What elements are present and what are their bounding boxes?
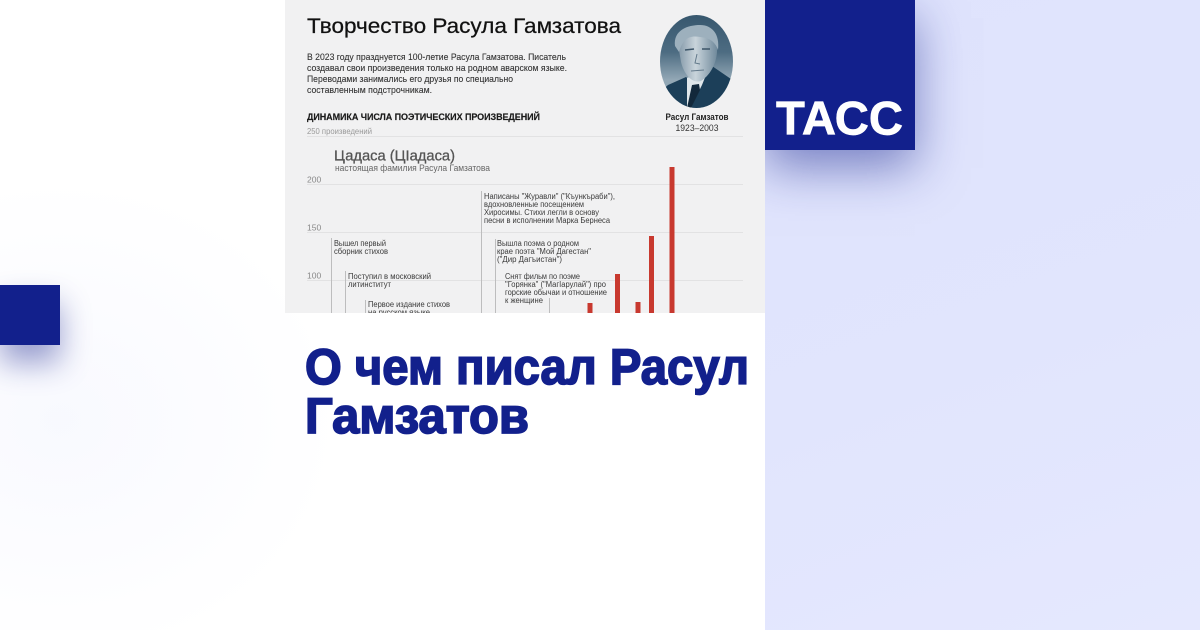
annotations: Поступил в московский <box>348 272 431 281</box>
y axis values: 150 <box>307 222 321 232</box>
chart heading: ДИНАМИКА ЧИСЛА ПОЭТИЧЕСКИХ ПРОИЗВЕДЕНИЙ <box>307 111 540 122</box>
annotations: Вышла поэма о родном <box>497 239 579 248</box>
surname note <box>334 148 491 173</box>
annotations: Снят фильм по поэме <box>505 272 581 281</box>
panel: infographic preview <box>285 0 765 313</box>
annotations: ("Дир Дагъистан") <box>497 255 562 264</box>
annotations: Вышел первый <box>334 239 386 248</box>
surname note: Цадаса (ЦIадаса) <box>334 148 455 164</box>
chart: poetic works dynamics <box>307 126 743 317</box>
bars <box>588 167 674 313</box>
portrait: Rasul Gamzatov <box>660 15 736 112</box>
annotations: "Горянка" ("МагIарулай") про <box>505 280 607 289</box>
surname note: настоящая фамилия Расула Гамзатова <box>335 163 491 173</box>
portrait caption: 1923–2003 <box>676 123 718 133</box>
intro text: создавал свои произведения только на родном аварском языке. <box>307 63 567 73</box>
decorative blue square <box>0 285 60 345</box>
annotation leader lines <box>332 191 550 313</box>
headline: Гамзатов <box>305 388 529 444</box>
y axis values: 100 <box>307 270 321 280</box>
y axis values <box>307 174 321 280</box>
y axis unit label: 250 произведений <box>307 126 372 136</box>
logo: TASS square <box>765 0 915 150</box>
panel: right lavender background <box>765 0 1200 630</box>
intro text: Переводами занимались его друзья по специально <box>307 74 513 84</box>
portrait caption <box>666 112 729 133</box>
annotations: вдохновленные посещением <box>484 200 584 209</box>
annotations: к женщине <box>505 296 544 305</box>
annotations: горские обычаи и отношение <box>505 288 608 297</box>
gridlines <box>307 136 743 280</box>
intro text <box>307 52 567 95</box>
annotations: песни в исполнении Марка Бернеса <box>484 216 611 225</box>
annotations: литинститут <box>348 280 391 289</box>
background glow <box>0 0 765 630</box>
portrait caption: Расул Гамзатов <box>666 112 729 122</box>
annotations <box>334 192 615 317</box>
annotations: крае поэта "Мой Дагестан" <box>497 247 591 256</box>
annotations: Первое издание стихов <box>368 300 450 309</box>
logo: TASS square: ТАСС <box>776 92 903 144</box>
annotations: Хиросимы. Стихи легли в основу <box>484 208 599 217</box>
intro text: составленным подстрочникам. <box>307 85 432 95</box>
annotations: сборник стихов <box>334 247 388 256</box>
infographic title: Творчество Расула Гамзатова <box>307 14 621 38</box>
headline: О чем писал Расул <box>305 339 749 395</box>
y axis values: 200 <box>307 174 321 184</box>
headline <box>305 339 749 444</box>
intro text: В 2023 году празднуется 100-летие Расула Гамзатова. Писатель <box>307 52 566 62</box>
annotations: Написаны "Журавли" ("Къункъраби"), <box>484 192 615 201</box>
